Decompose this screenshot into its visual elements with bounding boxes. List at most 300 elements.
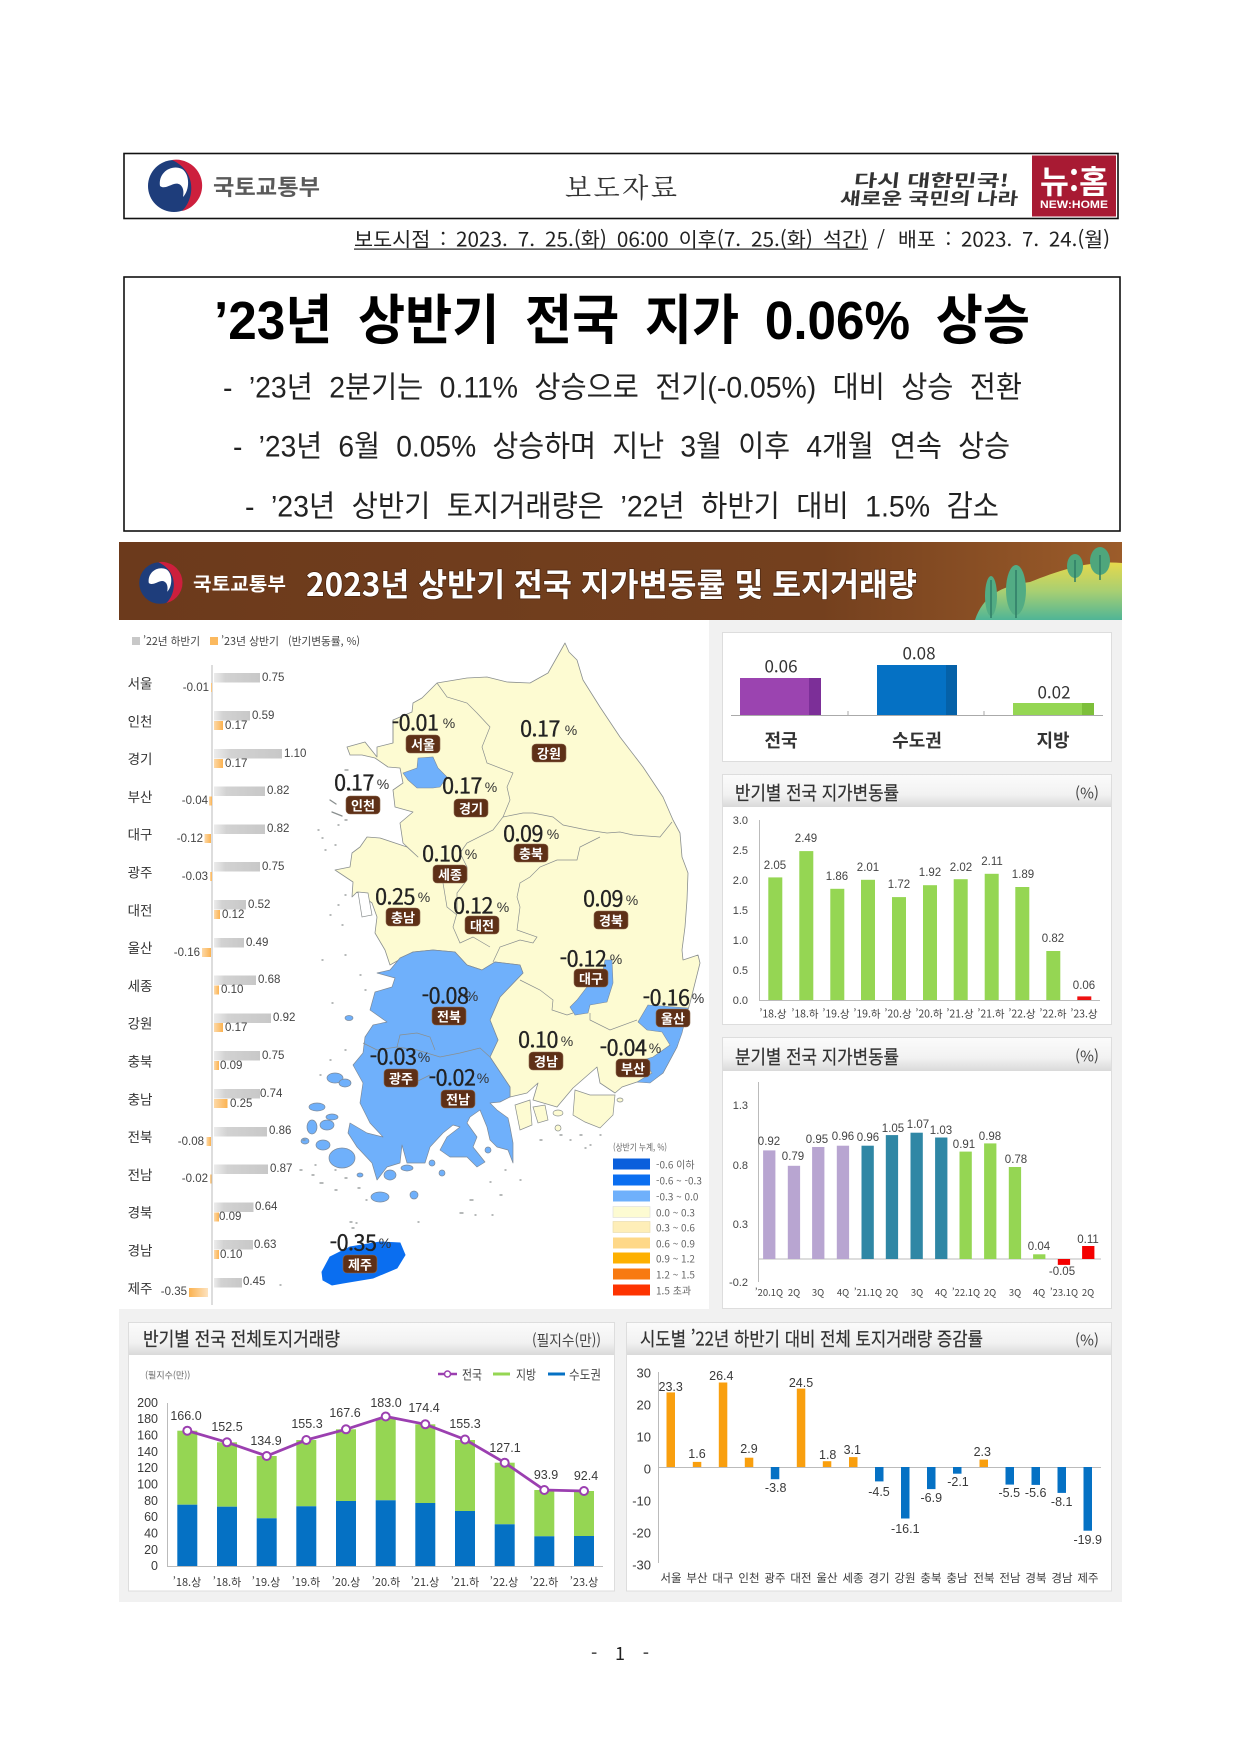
bar chart: 2.5 (733, 845, 748, 857)
bar chart: 1.8 (819, 1448, 836, 1462)
region: Daejeon: % (497, 899, 509, 915)
icon: banner emblem (139, 562, 183, 604)
bar chart: 1.5 (733, 905, 748, 917)
panel header: 시도별 ’22년 하반기 대비 전체 토지거래량 증감률 (640, 1324, 983, 1352)
region: Jeonbuk: 전북 (437, 1006, 461, 1026)
region: Gangwon (520, 712, 577, 762)
new home logo: NEW:HOME (1040, 199, 1108, 211)
stacked bars with line: 152.5 (211, 1420, 243, 1434)
legend for side bars: (반기변동률, %) (288, 633, 360, 649)
bar chart: 0.92 (758, 1136, 780, 1148)
bar chart: 2.9 (740, 1442, 758, 1456)
stacked bars with line: ’22.상 (490, 1574, 518, 1590)
map legend: -0.3 ~ 0.0 (656, 1188, 699, 1204)
stacked bars with line: ’20.하 (372, 1574, 400, 1590)
bar chart: 0.96 (832, 1131, 854, 1143)
stacked bars with line: ’19.상 (252, 1574, 280, 1590)
panel: quarterly land price change (722, 1038, 1112, 1308)
bar chart: 0.82 (1042, 933, 1064, 945)
region: Gyeonggi: % (485, 779, 497, 795)
stacked bars with line: 100 (137, 1478, 158, 1492)
new home logo (1032, 156, 1116, 216)
region: Busan: -0.04 (600, 1032, 647, 1062)
orange bar values: 0.10 (221, 984, 243, 996)
stacked bars with line: 166.0 (170, 1409, 202, 1423)
panel: nationwide summary (722, 632, 1112, 762)
bar chart: -0.2 (729, 1277, 748, 1289)
bar chart: 전북 (973, 1570, 995, 1586)
region: Gyeongnam: 0.10 (518, 1024, 558, 1054)
orange bar values: 0.09 (219, 1211, 241, 1223)
region: Gangwon: 강원 (537, 744, 561, 762)
bar chart: 0.8 (733, 1160, 748, 1172)
bar chart: -10 (632, 1494, 651, 1508)
map legend: 1.2 ~ 1.5 (656, 1266, 695, 1282)
bar chart: 3Q (1009, 1285, 1021, 1299)
legend for side bars (132, 633, 360, 649)
orange bar values: -0.03 (182, 871, 208, 883)
region: Busan: 부산 (621, 1058, 645, 1078)
stacked bars with line (137, 1396, 603, 1590)
gray bar values: 0.49 (246, 937, 268, 949)
region: Gyeonggi: 0.17 (442, 770, 482, 800)
bar chart: 2Q (984, 1285, 996, 1299)
row labels: 전북 (128, 1126, 152, 1146)
panel header: (%) (1075, 782, 1099, 804)
region: Jeju (330, 1226, 391, 1274)
bar chart: 세종 (842, 1570, 864, 1586)
bar chart: 강원 (894, 1570, 916, 1586)
row labels: 대구 (128, 824, 152, 844)
bar chart: 10 (637, 1430, 651, 1444)
bar chart: 0.3 (733, 1219, 748, 1231)
region: Incheon: 인천 (351, 796, 375, 814)
chart legend: 전국 (462, 1364, 482, 1384)
northern and eastern regions (335, 643, 700, 1107)
bar chart: 0.78 (1005, 1154, 1027, 1166)
bar chart: 3.0 (733, 815, 748, 827)
Ulsan and Busan (637, 1005, 688, 1083)
Jeju (322, 1242, 405, 1285)
gray bar values: 0.87 (270, 1163, 292, 1175)
panel: half-year land price change (722, 774, 1112, 1024)
region: Daegu: % (610, 951, 622, 967)
stacked bars with line: 140 (137, 1445, 158, 1459)
region: Chungbuk (503, 818, 559, 862)
region: Ulsan: % (692, 990, 704, 1006)
panel: regional change in transactions (626, 1322, 1112, 1591)
row labels: 경기 (128, 748, 152, 768)
bar chart: 0 (644, 1462, 651, 1476)
gray bar values: 0.59 (252, 710, 274, 722)
bar chart: -8.1 (1051, 1495, 1073, 1509)
gray bar values: 0.63 (254, 1239, 276, 1251)
panel header: 반기별 전국 전체토지거래량 (143, 1324, 340, 1352)
region: Daejeon (453, 890, 509, 934)
orange bar values: -0.16 (174, 947, 200, 959)
region: Busan (600, 1032, 661, 1078)
bar chart (733, 815, 1100, 1022)
orange bar values: -0.35 (161, 1286, 187, 1298)
map legend: 0.3 ~ 0.6 (656, 1220, 695, 1234)
bar chart: ’19.하 (853, 1006, 881, 1022)
region: Chungbuk: % (547, 826, 559, 842)
gray bar values: 0.86 (269, 1125, 291, 1137)
region: Daegu: 대구 (579, 968, 603, 988)
gray bar values: 0.68 (258, 974, 280, 986)
bar chart: 3Q (812, 1285, 824, 1299)
bar chart: 0.11 (1077, 1234, 1099, 1246)
bar chart: 2.11 (981, 856, 1003, 868)
region: Sejong: 세종 (438, 864, 462, 884)
panel header (129, 1323, 614, 1355)
region: Ulsan: -0.16 (643, 982, 689, 1012)
stacked bars with line: 174.4 (408, 1401, 440, 1415)
stacked bars with line: ’21.상 (411, 1574, 439, 1590)
bar: capital area: 0.08 (902, 640, 936, 664)
chart legend: 수도권 (569, 1364, 601, 1384)
row labels: 대전 (128, 899, 152, 919)
bar chart: -20 (632, 1526, 651, 1540)
region: Daegu (560, 942, 622, 988)
bar chart: 1.86 (826, 871, 848, 883)
bar chart: 경남 (1051, 1570, 1073, 1586)
region: Sejong: 0.10 (422, 838, 462, 868)
stacked bars with line: ’19.하 (292, 1574, 320, 1590)
region: Jeonnam (429, 1062, 489, 1108)
bar chart: 3Q (911, 1285, 923, 1299)
bar chart: 인천 (738, 1570, 760, 1586)
bar chart: 1.6 (688, 1447, 706, 1461)
bar chart: 30 (637, 1366, 651, 1380)
bar chart: 2.01 (857, 862, 879, 874)
bar chart: 26.4 (709, 1369, 734, 1383)
bar chart: ’21.하 (977, 1006, 1005, 1022)
region: Daegu: -0.12 (560, 942, 606, 974)
icon: government emblem (148, 160, 202, 212)
orange bar values: -0.04 (182, 795, 209, 807)
bar chart: 대전 (790, 1570, 812, 1586)
region: Jeonnam: -0.02 (429, 1062, 475, 1092)
stacked bars with line: 20 (144, 1543, 158, 1557)
bar chart: 광주 (764, 1570, 786, 1586)
chart: regional half-year bars (128, 665, 306, 1305)
main title: ’23년 상반기 전국 지가 0.06% 상승 (214, 291, 1030, 351)
orange bar values: -0.08 (178, 1136, 204, 1148)
bar chart: -16.1 (891, 1522, 920, 1536)
bar chart: -30 (632, 1558, 651, 1572)
row labels: 세종 (128, 975, 152, 995)
region: Chungnam: % (418, 889, 430, 905)
bar chart: 0.98 (979, 1131, 1001, 1143)
bar chart: ’21.상 (946, 1006, 974, 1022)
region: Jeju: 제주 (348, 1254, 372, 1274)
orange bars (189, 683, 228, 1297)
stacked bars with line: 167.6 (329, 1406, 361, 1420)
bar: provinces (1013, 678, 1094, 753)
orange bar values: 0.17 (225, 1022, 247, 1034)
bar chart: 1.92 (919, 867, 941, 879)
row labels: 제주 (128, 1277, 152, 1297)
bar chart: 서울 (660, 1570, 682, 1586)
bar: provinces: 지방 (1036, 727, 1070, 753)
gray bar values: 0.75 (262, 672, 284, 684)
bar chart: 1.0 (733, 935, 748, 947)
region: Gyeongnam: % (561, 1033, 573, 1049)
coastal specks (280, 770, 601, 1285)
gray bar values: 0.92 (273, 1012, 295, 1024)
bar chart: 0.91 (953, 1139, 975, 1151)
region: Chungnam: 0.25 (375, 880, 415, 912)
bar chart: 대구 (712, 1570, 734, 1586)
illustration: hill and trees (975, 547, 1122, 620)
region: Chungbuk: 0.09 (503, 818, 543, 848)
legend for side bars: ’23년 상반기 (221, 633, 279, 649)
banner (119, 542, 1122, 620)
row labels: 경북 (128, 1202, 152, 1222)
region: Sejong (422, 838, 477, 884)
row labels: 울산 (128, 937, 152, 957)
bar chart: 1.89 (1012, 869, 1034, 881)
bar chart: 0.79 (782, 1151, 804, 1163)
chart legend: 지방 (516, 1364, 536, 1384)
gray bar values: 0.75 (262, 861, 284, 873)
region: Gwangju (370, 1040, 430, 1088)
bar chart: 0.96 (857, 1132, 879, 1144)
map legend: (상반기 누계, %) (613, 1140, 667, 1154)
new home logo: 뉴:홈 (1040, 157, 1108, 203)
region: Gyeongnam (518, 1024, 573, 1070)
row labels: 충남 (128, 1088, 152, 1108)
stacked bars with line: 60 (144, 1510, 158, 1524)
region: Sejong: % (465, 846, 477, 862)
unit note: (필지수(만)) (145, 1368, 190, 1382)
stacked bars with line: 183.0 (370, 1396, 402, 1410)
map legend: 0.0 ~ 0.3 (656, 1204, 695, 1220)
region: Gwangju: -0.03 (370, 1040, 416, 1072)
stacked bars with line: 40 (144, 1526, 158, 1540)
map legend: 0.6 ~ 0.9 (656, 1236, 695, 1250)
stacked bars with line: 180 (137, 1412, 158, 1426)
bar chart: 3.1 (844, 1443, 861, 1457)
bar chart: 1.3 (733, 1100, 748, 1112)
bar chart: -19.9 (1073, 1533, 1102, 1547)
bar chart: 1.05 (882, 1123, 904, 1135)
map panel (128, 633, 704, 1305)
row labels: 부산 (128, 786, 152, 806)
slogan calligraphy: 다시 대한민국! (853, 167, 1010, 191)
row labels: 전남 (128, 1164, 152, 1184)
bar chart: -4.5 (868, 1485, 890, 1499)
bar chart: 울산 (816, 1570, 838, 1586)
bar chart (632, 1366, 1102, 1586)
Seoul (403, 757, 447, 788)
region: Ulsan (643, 982, 704, 1028)
chart legend (438, 1364, 601, 1384)
region: Busan: % (649, 1040, 661, 1056)
row labels: 인천 (128, 710, 152, 730)
panel header: 분기별 전국 지가변동률 (735, 1042, 899, 1070)
bar chart: ’23.상 (1070, 1006, 1098, 1022)
gray bar values: 0.75 (262, 1050, 284, 1062)
bar chart: ’19.상 (822, 1006, 850, 1022)
map of South Korea (280, 643, 700, 1285)
bar chart: 1.72 (888, 879, 910, 891)
legend for side bars: ’22년 하반기 (143, 633, 200, 649)
region: Incheon: 0.17 (334, 766, 374, 798)
bar chart: -2.1 (947, 1475, 969, 1489)
bar chart: 경북 (1025, 1570, 1047, 1586)
panel header: 반기별 전국 지가변동률 (735, 778, 899, 806)
stacked bars with line: 155.3 (291, 1417, 323, 1431)
bar chart: ’23.1Q (1050, 1285, 1078, 1299)
southeast islands (515, 1090, 623, 1131)
banner ministry name: 국토교통부 (193, 570, 286, 596)
bar chart: 제주 (1077, 1570, 1099, 1586)
bar chart: 2.3 (974, 1445, 991, 1459)
row labels (128, 672, 152, 1297)
bar chart: ’20.상 (884, 1006, 912, 1022)
bar chart: 0.95 (806, 1134, 828, 1146)
map legend: -0.6 이하 (656, 1156, 695, 1172)
region: Chungbuk: 충북 (519, 844, 543, 862)
orange bar values: -0.12 (177, 833, 203, 845)
orange bar values: 0.09 (220, 1060, 242, 1072)
orange bar values (161, 682, 252, 1298)
bar chart: 1.03 (930, 1125, 952, 1137)
region: Ulsan: 울산 (661, 1008, 685, 1028)
row labels: 서울 (128, 672, 152, 692)
bar chart: 20 (637, 1398, 651, 1412)
Daegu (570, 960, 613, 1015)
bar chart: 0.06 (1073, 980, 1095, 992)
region: Daejeon: 0.12 (453, 890, 493, 920)
region: Jeonbuk: % (466, 988, 478, 1004)
map legend (613, 1140, 702, 1298)
gray bars (214, 673, 282, 1288)
bar chart: -6.9 (921, 1491, 942, 1505)
southwest islands (301, 1016, 491, 1202)
gray bar values: 0.45 (243, 1276, 265, 1288)
bar chart: 2.0 (733, 875, 748, 887)
bar chart: 0.0 (733, 995, 748, 1007)
release date line: 배포 : 2023. 7. 24.(월) (898, 224, 1110, 252)
bar chart: 0.04 (1028, 1241, 1051, 1253)
orange bar values: 0.25 (230, 1098, 252, 1110)
panel header: (%) (1075, 1046, 1099, 1066)
stacked bars with line: 0 (151, 1559, 158, 1573)
orange bar values: -0.01 (183, 682, 209, 694)
orange bar values: -0.02 (182, 1173, 208, 1185)
baseline (731, 711, 1103, 716)
region: Incheon (334, 766, 389, 814)
bar chart: 2.05 (764, 860, 786, 872)
bar: capital area (877, 640, 957, 753)
bar chart: 2Q (1082, 1285, 1094, 1299)
stacked bars with line: 134.9 (250, 1434, 282, 1448)
region: Gyeongbuk (583, 882, 638, 930)
bar chart: 24.5 (789, 1376, 813, 1390)
bar chart: ’20.하 (915, 1006, 943, 1022)
orange bar values: 0.17 (225, 758, 247, 770)
orange bar values: 0.12 (222, 909, 244, 921)
bar: nationwide: 전국 (764, 727, 798, 753)
provincial boundaries (363, 683, 672, 1085)
bar: nationwide: 0.06 (764, 652, 798, 678)
bar chart: -5.6 (1025, 1486, 1047, 1500)
region: Seoul: 서울 (411, 734, 435, 754)
bar: capital area: 수도권 (892, 727, 942, 753)
region: Gwangju: 광주 (389, 1068, 413, 1088)
region: Jeju: -0.35 (330, 1226, 376, 1258)
bar chart: 충북 (920, 1570, 942, 1586)
stacked bars with line: ’20.상 (332, 1574, 360, 1590)
bar chart: 부산 (686, 1570, 708, 1586)
bar chart: 23.3 (659, 1380, 683, 1394)
stacked bars with line: 160 (137, 1428, 158, 1442)
stacked bars with line: 93.9 (534, 1468, 558, 1482)
stacked bars with line: ’18.상 (173, 1574, 201, 1590)
bar: provinces: 0.02 (1037, 678, 1071, 704)
gray backdrop (119, 620, 1122, 1602)
region: Seoul (392, 706, 455, 754)
region: Gyeongbuk: % (626, 892, 638, 908)
row labels: 충북 (128, 1050, 152, 1070)
bar chart: 4Q (1033, 1285, 1045, 1299)
bar chart: 충남 (946, 1570, 968, 1586)
bar chart: ’22.1Q (952, 1285, 980, 1299)
bar chart: 2.49 (795, 833, 817, 845)
panel header (723, 775, 1111, 807)
subtitle 1: - ’23년 2분기는 0.11% 상승으로 전기(-0.05%) 대비 상승 전환 (223, 372, 1022, 404)
map legend: -0.6 ~ -0.3 (656, 1172, 702, 1188)
region: Jeonnam: 전남 (446, 1090, 470, 1108)
gray bar values (243, 672, 306, 1288)
bar chart: 2Q (788, 1285, 800, 1299)
slogan calligraphy (839, 167, 1022, 209)
stacked bars with line: 120 (137, 1461, 158, 1475)
region: Gyeonggi: 경기 (459, 798, 483, 818)
headline box (124, 277, 1120, 531)
stacked bars with line: 80 (144, 1494, 158, 1508)
region: Incheon: % (377, 776, 389, 792)
region: Seoul: % (443, 715, 455, 731)
bar chart: ’18.하 (791, 1006, 819, 1022)
bar chart: ’21.1Q (854, 1285, 882, 1299)
bar chart: 4Q (837, 1285, 849, 1299)
region: Jeju: % (379, 1235, 391, 1251)
region: Seoul: -0.01 (392, 706, 438, 738)
bar chart: ’22.상 (1008, 1006, 1036, 1022)
bar chart: -5.5 (999, 1486, 1020, 1500)
stacked bars with line: ’21.하 (451, 1574, 479, 1590)
bar chart (729, 1082, 1101, 1299)
Jeolla regions (348, 950, 523, 1180)
bar chart: -3.8 (765, 1481, 787, 1495)
Cheonsu bay (358, 892, 372, 917)
release date line: / (877, 224, 885, 252)
row labels: 강원 (128, 1013, 152, 1033)
row labels: 경남 (128, 1240, 152, 1260)
gray bar values: 0.82 (267, 823, 289, 835)
region: Chungnam (375, 880, 430, 926)
panel header: (%) (1075, 1330, 1099, 1350)
slogan calligraphy: 새로운 국민의 나라 (839, 185, 1020, 209)
gray bar values: 0.64 (255, 1201, 278, 1213)
gray bar values: 0.52 (248, 899, 270, 911)
panel: half-year land transactions (128, 1322, 614, 1591)
bar chart: ’20.1Q (755, 1285, 783, 1299)
